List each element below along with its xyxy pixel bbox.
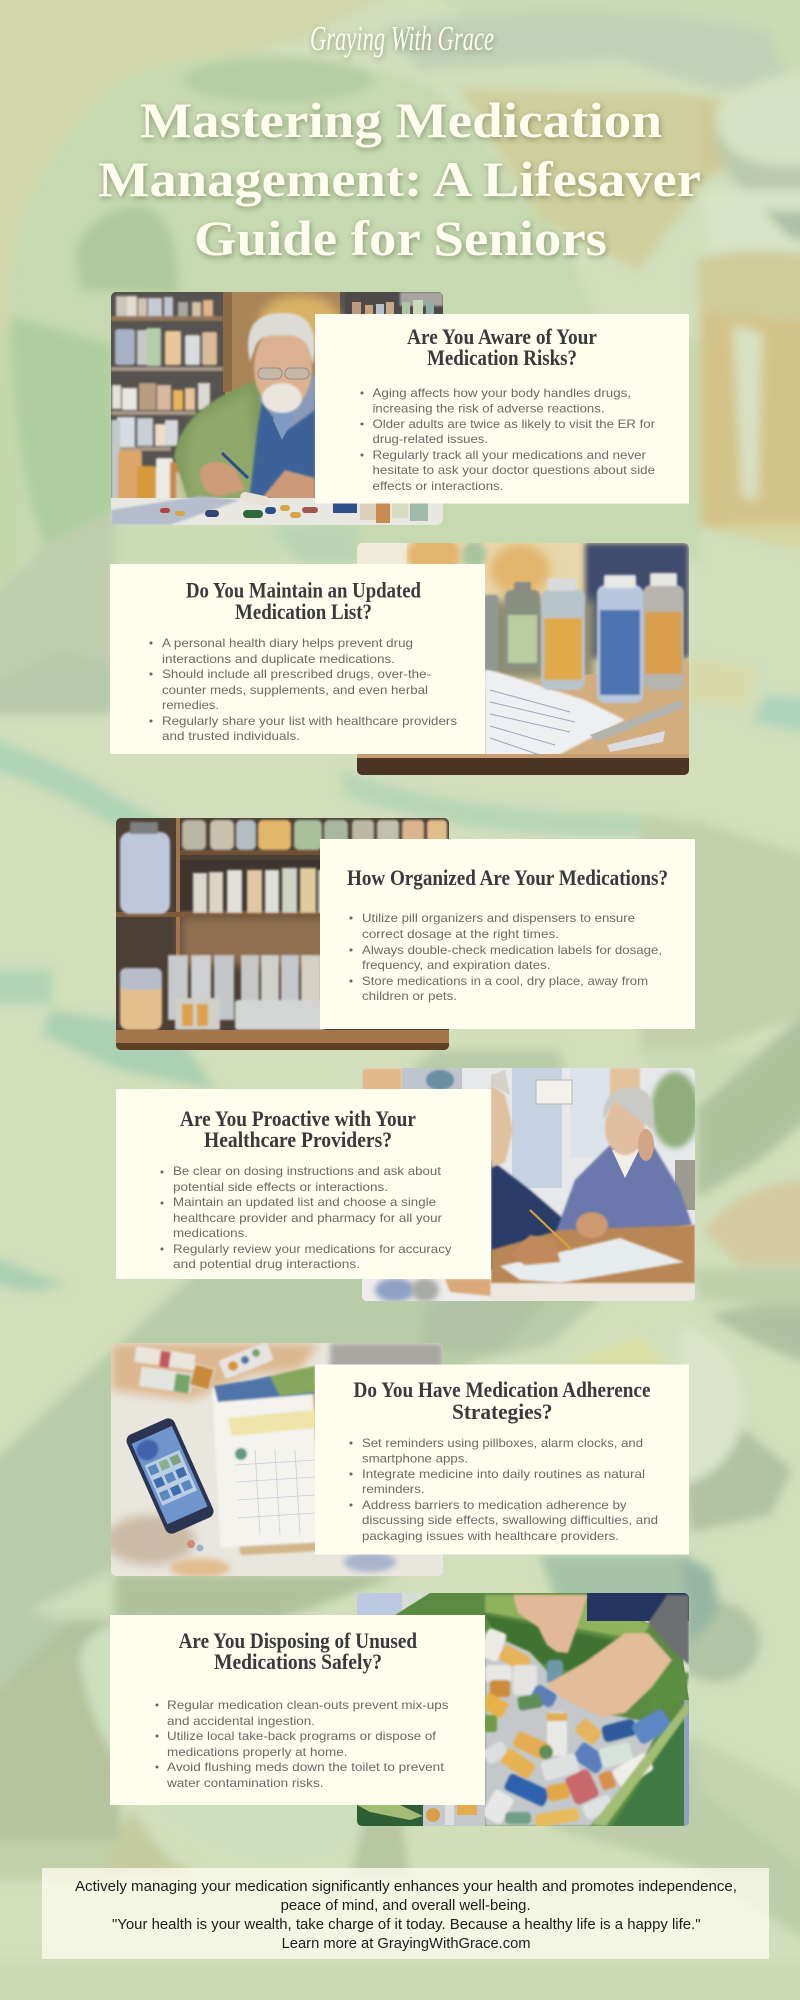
bullet list: effects or interactions. xyxy=(372,479,504,493)
card: updated medication list xyxy=(110,564,485,754)
heading: How Organized Are Your Medications? xyxy=(347,865,668,890)
bullet list: and trusted individuals. xyxy=(162,729,300,743)
bullet list: medications properly at home. xyxy=(167,1745,348,1759)
card: adherence strategies xyxy=(315,1364,689,1554)
bullet list: healthcare provider and pharmacy for all your xyxy=(173,1211,442,1225)
logo: Graying With Grace: Graying With Grace xyxy=(310,19,494,58)
bullet list: Regularly share your list with healthcare providers xyxy=(162,714,457,728)
illustration: bottles and written list on table xyxy=(357,535,689,775)
panel: safe disposal xyxy=(110,1593,689,1828)
bullet list: Utilize pill organizers and dispensers to ensure xyxy=(362,911,635,925)
heading: Medication List? xyxy=(235,599,372,624)
heading: Healthcare Providers? xyxy=(204,1127,392,1152)
footer callout: peace of mind, and overall well-being. xyxy=(281,1897,531,1914)
panel: organized medications xyxy=(116,818,695,1050)
bullet list: counter meds, supplements, and even herbal xyxy=(162,683,428,697)
bullet list: drug-related issues. xyxy=(372,432,488,446)
bullet list: Regularly track all your medications and never xyxy=(372,448,646,462)
heading xyxy=(180,1106,416,1152)
illustration: senior couple reviewing paperwork xyxy=(362,1068,699,1302)
bullet list: water contamination risks. xyxy=(166,1776,324,1790)
card: medication risks xyxy=(315,314,689,504)
title: Mastering Medication xyxy=(140,92,662,148)
bullet list: Store medications in a cool, dry place, away from xyxy=(362,974,648,988)
bullet list: Aging affects how your body handles drugs, xyxy=(372,386,631,400)
bullet list: Older adults are twice as likely to visit the ER for xyxy=(372,417,655,431)
footer callout: "Your health is your wealth, take charge of it today. Because a healthy life is a happy life." xyxy=(112,1916,700,1933)
bullet list xyxy=(156,1698,448,1790)
illustration: smartphone, calendar and pill boxes xyxy=(105,1341,443,1578)
bullet list: interactions and duplicate medications. xyxy=(162,652,395,666)
bullet list: potential side effects or interactions. xyxy=(173,1180,388,1194)
bullet list: Avoid flushing meds down the toilet to prevent xyxy=(167,1760,445,1774)
bullet list xyxy=(360,386,655,493)
bullet list: discussing side effects, swallowing difficulties, and xyxy=(362,1513,658,1527)
panel: proactive with healthcare providers xyxy=(116,1068,699,1302)
heading: Medications Safely? xyxy=(214,1649,382,1674)
panel: updated medication list xyxy=(110,535,689,775)
footer callout: Learn more at GrayingWithGrace.com xyxy=(282,1935,531,1952)
heading: Are You Disposing of Unused xyxy=(179,1628,417,1653)
bullet list: and accidental ingestion. xyxy=(167,1714,315,1728)
bullet list: reminders. xyxy=(362,1482,424,1496)
bullet list: Maintain an updated list and choose a single xyxy=(173,1195,436,1209)
bullet list: Be clear on dosing instructions and ask about xyxy=(173,1164,442,1178)
bullet list: Set reminders using pillboxes, alarm clocks, and xyxy=(362,1436,643,1450)
heading xyxy=(186,578,421,624)
heading xyxy=(354,1377,651,1424)
heading: Are You Proactive with Your xyxy=(180,1106,416,1131)
panel: medication risks xyxy=(111,292,689,525)
illustration: wooden shelves of medicine bottles xyxy=(116,818,449,1050)
card: safe disposal xyxy=(110,1615,485,1805)
bullet list: medications. xyxy=(173,1226,248,1240)
bullet list: Regularly review your medications for accuracy xyxy=(173,1242,452,1256)
bullet list: smartphone apps. xyxy=(362,1452,468,1466)
bullet list: correct dosage at the right times. xyxy=(362,927,559,941)
title xyxy=(98,92,701,266)
heading: Medication Risks? xyxy=(427,345,577,370)
bullet list xyxy=(350,911,662,1003)
bullet list: children or pets. xyxy=(362,989,457,1003)
bullet list: Utilize local take-back programs or dispose of xyxy=(167,1729,437,1743)
illustration: hands sorting pill bottles in green bag xyxy=(357,1593,689,1828)
heading: Strategies? xyxy=(452,1399,552,1424)
bullet list xyxy=(160,1164,452,1271)
heading xyxy=(407,324,597,370)
bullet list: and potential drug interactions. xyxy=(173,1257,360,1271)
bullet list: remedies. xyxy=(162,698,219,712)
bullet list: Should include all prescribed drugs, over-the- xyxy=(162,667,431,681)
title: Management: A Lifesaver xyxy=(98,151,701,207)
illustration: senior man at medicine shelves xyxy=(111,292,443,525)
heading xyxy=(179,1628,417,1674)
heading: Are You Aware of Your xyxy=(407,324,597,349)
bullet list xyxy=(150,636,457,743)
panel: adherence strategies xyxy=(105,1341,689,1578)
card: proactive with healthcare providers xyxy=(116,1089,491,1279)
bullet list: Always double-check medication labels for dosage, xyxy=(362,943,662,957)
bullet list: A personal health diary helps prevent drug xyxy=(162,636,413,650)
heading: Do You Maintain an Updated xyxy=(186,578,421,602)
bullet list xyxy=(350,1436,658,1543)
bullet list: packaging issues with healthcare providers. xyxy=(362,1529,619,1543)
footer callout xyxy=(42,1868,769,1959)
bullet list: hesitate to ask your doctor questions about side xyxy=(372,463,655,477)
bullet list: Regular medication clean-outs prevent mix-ups xyxy=(167,1698,448,1712)
bullet list: Integrate medicine into daily routines as natural xyxy=(362,1467,645,1481)
bullet list: Address barriers to medication adherence by xyxy=(362,1498,626,1512)
bullet list: frequency, and expiration dates. xyxy=(362,958,550,972)
footer callout: Actively managing your medication significantly enhances your health and promotes independence, xyxy=(75,1878,737,1895)
bullet list: increasing the risk of adverse reactions. xyxy=(372,402,604,416)
card: organized medications xyxy=(320,839,695,1029)
title: Guide for Seniors xyxy=(194,210,607,266)
heading: Do You Have Medication Adherence xyxy=(354,1377,651,1402)
